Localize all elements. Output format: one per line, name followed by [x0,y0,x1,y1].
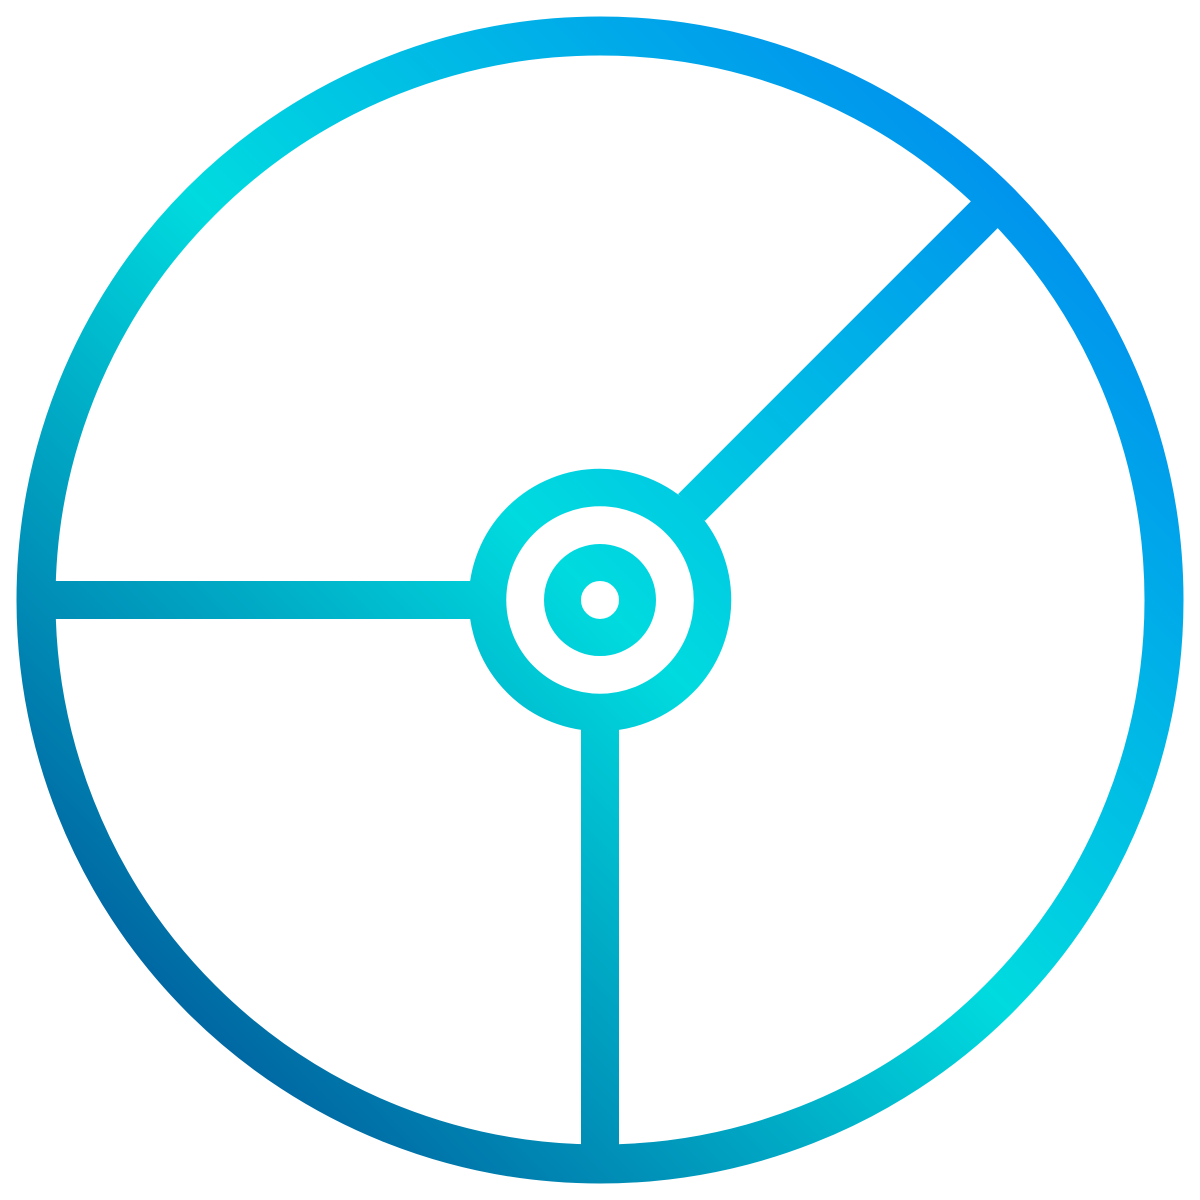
spoke: bottom vertical [581,728,619,1160]
center ring [562,562,638,638]
hub ring [488,488,712,712]
spoke: upper-right diagonal [692,209,990,508]
spoke: left horizontal [40,581,472,619]
